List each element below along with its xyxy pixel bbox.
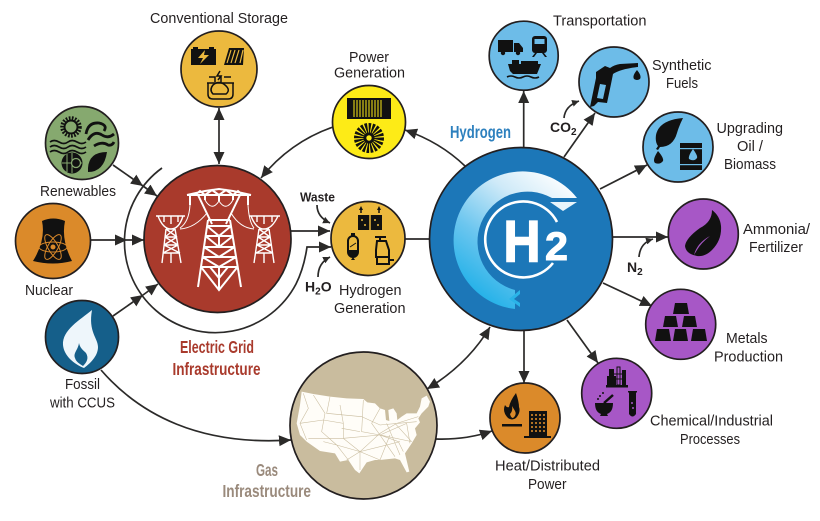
icon: burner bar (502, 424, 522, 426)
node: hydrogen generation (331, 202, 405, 276)
arrow: fossil to grid (113, 284, 158, 316)
node: heat and distributed power (490, 383, 560, 453)
arrow: hydrogen to chemical (567, 320, 598, 363)
icon: building (524, 411, 551, 438)
arrow: gas infrastructure to heat (436, 431, 492, 439)
label: power generation: Generation (334, 66, 405, 82)
label: nitrogen input: N (627, 259, 637, 275)
node: nuclear (16, 204, 90, 278)
icon: leaf (656, 118, 683, 150)
arrow: nitrogen input (639, 239, 653, 257)
label: electric grid infrastructure: Electric Grid (180, 337, 254, 357)
arrows: connections between nodes (91, 91, 668, 441)
label: hydrogen: Hydrogen (450, 122, 511, 142)
label: fossil with CCUS: with CCUS (49, 396, 115, 412)
icon: ship (507, 60, 541, 78)
label: metals production: Metals (726, 331, 768, 347)
label: synthetic fuels (652, 58, 712, 92)
icon: flame (504, 393, 520, 420)
label: gas infrastructure (222, 460, 311, 501)
label: renewables: Renewables (40, 184, 116, 200)
node: transportation (489, 21, 558, 90)
map: United States pipelines (297, 392, 430, 473)
arrow: carbon dioxide input (564, 101, 579, 118)
node: fossil with CCUS (46, 300, 118, 374)
label: synthetic fuels: Fuels (666, 76, 698, 92)
arrow: waste input (317, 205, 330, 223)
node: power generation (332, 86, 406, 158)
icon: cooling tower (33, 218, 72, 264)
label: gas infrastructure: Infrastructure (222, 481, 311, 501)
arrow: renewables to grid (113, 165, 157, 196)
label: chemical industrial processes: Chemical/Industrial (650, 414, 773, 430)
label: heat and distributed power (495, 458, 600, 493)
label: metals production (714, 331, 783, 366)
label: carbon dioxide input: CO (550, 119, 571, 135)
node: metals production (646, 289, 716, 359)
label: nuclear: Nuclear (25, 283, 73, 299)
arrow: nuclear to grid (91, 239, 144, 241)
label: upgrading oil biomass: Upgrading (716, 121, 783, 137)
icon: flame (63, 310, 98, 368)
arrow: hydrogen to power generation (405, 130, 465, 166)
label: hydrogen generation (334, 283, 406, 317)
label: hydrogen generation: Generation (334, 301, 406, 317)
label: electric grid infrastructure (172, 337, 261, 379)
icon: leaf (685, 210, 721, 256)
icon: turbine (359, 128, 379, 148)
label: upgrading oil biomass: Biomass (724, 157, 776, 173)
label: water input: H (305, 278, 315, 294)
node: synthetic fuels (579, 47, 649, 117)
arrow: grid to hydrogen generation (291, 230, 330, 232)
icon: fuel nozzle (590, 63, 638, 107)
icon: truck (498, 40, 523, 55)
icon: thin ring (485, 201, 557, 277)
arrow: hydrogen to metals (603, 283, 652, 306)
icon: pumped storage (207, 71, 234, 99)
icon: test tube (628, 391, 637, 416)
arrow: gas and hydrogen two-way (427, 327, 490, 389)
icon: barrel (680, 143, 702, 170)
icon: oil drop (654, 151, 663, 164)
label: fossil with CCUS: Fossil (65, 377, 100, 393)
label: heat and distributed power: Heat/Distributed (495, 458, 600, 474)
node: gas infrastructure (290, 352, 437, 499)
H2 symbol (504, 210, 568, 274)
icon: mortar and pestle (595, 392, 613, 416)
arrow: fossil to gas infrastructure (101, 370, 291, 441)
icon: gold ingots (655, 303, 707, 341)
icon: droplet (633, 70, 641, 80)
label: synthetic fuels: Synthetic (652, 58, 712, 74)
arrow: hydrogen to heat (523, 330, 525, 383)
label: conventional storage: Conventional Storage (150, 11, 288, 27)
arrow: storage to grid (218, 108, 220, 164)
node: renewables (46, 106, 118, 180)
H2 symbol: 2 (545, 225, 568, 269)
label: power generation (334, 50, 405, 82)
label: upgrading oil biomass (716, 121, 783, 173)
label: ammonia fertilizer: Fertilizer (749, 240, 803, 256)
node: conventional storage (181, 31, 257, 107)
icon: swoosh wedge (550, 202, 577, 211)
icon: sun (62, 118, 80, 136)
H2 symbol: H (504, 210, 540, 274)
icon: battery (191, 47, 216, 65)
arrow: hydrogen to upgrading (600, 165, 647, 189)
node: chemical industrial processes (582, 358, 652, 428)
label: fossil with CCUS (49, 377, 115, 412)
icon: atom (39, 232, 67, 262)
label: gas infrastructure: Gas (256, 460, 278, 480)
label: power generation: Power (349, 50, 389, 66)
icon: flywheel tiles (224, 48, 244, 65)
label: chemical industrial processes: Processes (680, 432, 740, 448)
label: ammonia fertilizer (743, 222, 811, 256)
icon: right pylon (249, 216, 280, 263)
icon: water waves (50, 140, 86, 154)
node: hydrogen core (430, 148, 612, 330)
icon: train (532, 36, 547, 57)
icon: power lines (180, 200, 254, 229)
connector: hydrogen generation to hydrogen (405, 238, 431, 240)
icon: electrolyzer (358, 206, 382, 230)
icon: central pylon (187, 189, 251, 290)
icon: fuel cell (347, 98, 391, 119)
icon: leaf (88, 152, 107, 172)
label: water input: 2 (315, 286, 321, 298)
icon: swoosh chevron (509, 290, 520, 307)
label: transportation: Transportation (553, 14, 646, 30)
label: metals production: Production (714, 350, 783, 366)
icon: geothermal globe (62, 152, 82, 174)
label: carbon dioxide input: 2 (571, 127, 577, 138)
icon: gradient swoosh (454, 171, 577, 309)
arrow: hydrogen to synthetic fuels (564, 113, 595, 157)
arrow: power generation to grid (261, 127, 333, 178)
label: heat and distributed power: Power (528, 477, 567, 493)
icon: left pylon (156, 216, 185, 263)
label: ammonia fertilizer: Ammonia/ (743, 222, 811, 238)
arc: grid surround feeding hydrogen generation (124, 168, 331, 333)
arrow: hydrogen to transportation (523, 91, 525, 147)
label: upgrading oil biomass: Oil / (737, 139, 764, 155)
node: upgrading oil and biomass (643, 112, 713, 182)
label: waste: Waste (300, 190, 335, 204)
icon: refinery (606, 367, 628, 388)
icon: wind (86, 123, 114, 146)
label: chemical industrial processes (650, 414, 773, 448)
icon: tank (348, 233, 358, 260)
label: hydrogen generation: Hydrogen (339, 283, 402, 299)
node: ammonia and fertilizer (668, 199, 738, 269)
node: electric grid (144, 166, 291, 312)
label: water input: O (321, 278, 332, 294)
arrow: water input (318, 257, 330, 277)
arrow: hydrogen to ammonia (613, 236, 668, 238)
label: electric grid infrastructure: Infrastructure (172, 359, 261, 379)
icon: reformer (375, 237, 394, 264)
label: nitrogen input: 2 (637, 267, 643, 278)
